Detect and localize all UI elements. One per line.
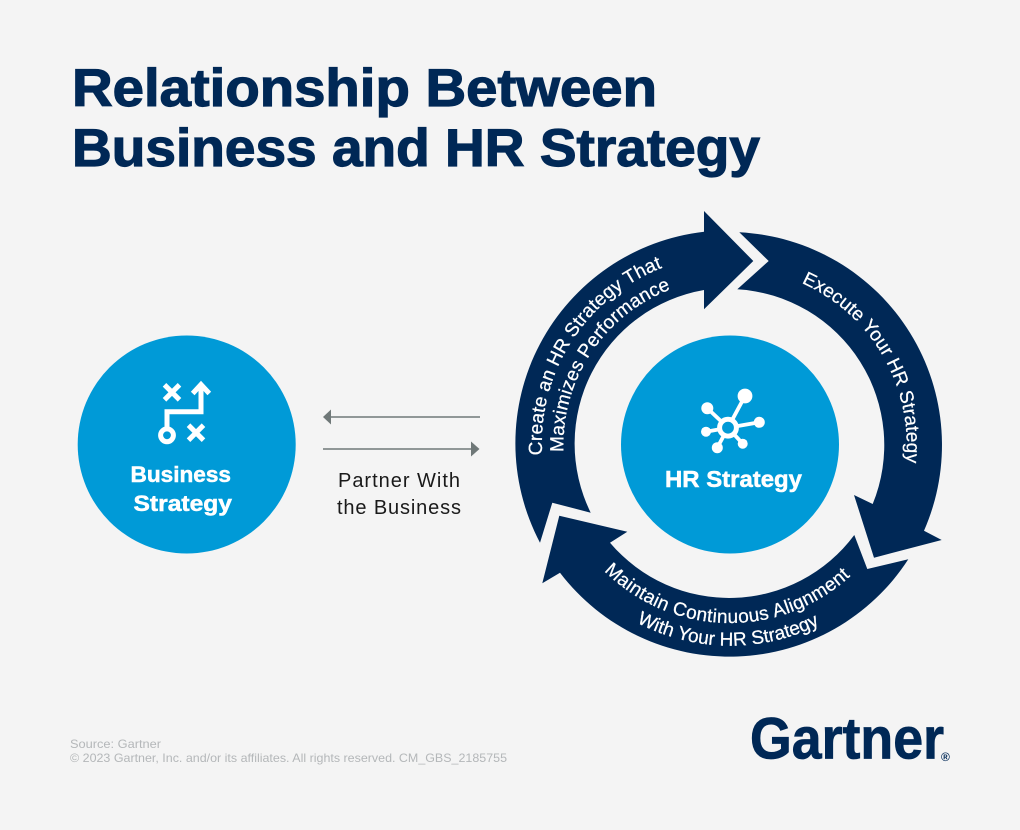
arrow: maintain continuous alignment: With Your HR Strategy	[640, 610, 816, 646]
label: business strategy: Business	[130, 462, 231, 487]
arrow: maintain continuous alignment	[542, 516, 908, 657]
text: partner with the business: the Business	[337, 497, 461, 519]
label: business strategy: Strategy	[134, 491, 233, 516]
arrow: from business to HR	[323, 442, 480, 456]
icon: network hub	[701, 389, 765, 453]
logo: Gartner: Gartner	[750, 706, 944, 772]
source and copyright: Source: Gartner	[70, 737, 161, 751]
arrow: execute your HR strategy: Execute Your HR Strategy	[802, 272, 918, 464]
text: partner with the business: Partner With	[338, 470, 460, 492]
panel: HR strategy circle	[621, 336, 839, 554]
text: partner with the business	[337, 470, 461, 519]
logo: Gartner: ®	[941, 750, 950, 764]
source and copyright: © 2023 Gartner, Inc. and/or its affiliates. All rights reserved. CM_GBS_2185755	[70, 751, 507, 765]
arrow: create an HR strategy	[515, 211, 754, 543]
title	[72, 59, 761, 178]
chart: HR strategy cycle	[515, 211, 942, 657]
arrow: execute your HR strategy	[737, 232, 942, 558]
source and copyright	[70, 737, 507, 765]
panel: business strategy circle	[78, 336, 296, 554]
label: HR strategy: HR Strategy	[665, 466, 802, 492]
label: business strategy	[130, 462, 233, 516]
title: Business and HR Strategy	[72, 119, 761, 178]
arrow: create an HR strategy: Create an HR Strategy That	[528, 256, 662, 454]
title: Relationship Between	[72, 59, 657, 118]
arrow: maintain continuous alignment: Maintain Continuous Alignment	[604, 562, 850, 624]
icon: strategy play path	[161, 384, 209, 442]
arrow: from HR to business	[323, 410, 480, 424]
arrow: create an HR strategy: Maximizes Performance	[550, 281, 669, 451]
